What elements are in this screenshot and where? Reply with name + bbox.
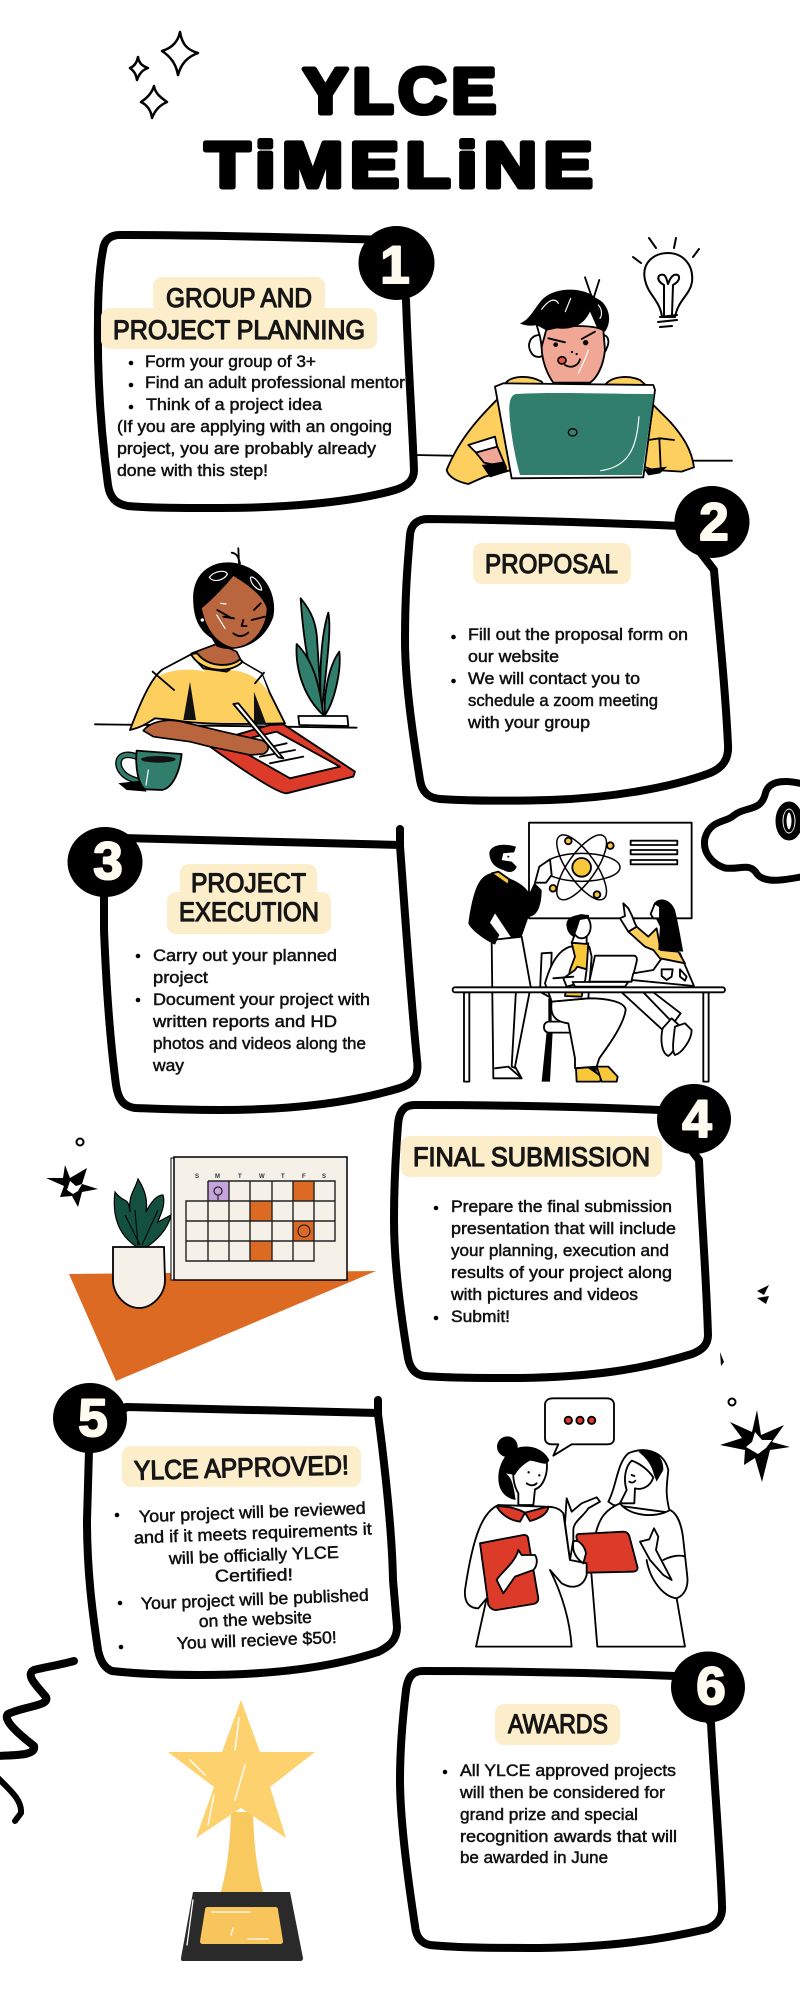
doodles: right small marks [720, 1285, 769, 1366]
number badge 2: 2 [699, 493, 729, 552]
text: step 3 list: Document your project with [153, 990, 370, 1009]
text: step 6 list: grand prize and special [460, 1805, 638, 1824]
calendar: S [322, 1174, 326, 1180]
number badge 5: 5 [78, 1389, 108, 1448]
text: step 4 list [434, 1197, 676, 1326]
number badge 1: 1 [380, 236, 410, 295]
number badge 2 [674, 486, 750, 558]
clipboard [143, 703, 355, 793]
number badge 6: 6 [696, 1657, 726, 1716]
calendar: T [281, 1174, 285, 1180]
text: step 3 list: way [152, 1056, 185, 1075]
calendar: W [259, 1174, 265, 1180]
text: step 2 list: with your group [467, 713, 590, 732]
doodle: star left [46, 1138, 98, 1207]
heading: final submission: FINAL SUBMISSION [413, 1142, 650, 1172]
text: step 5 list: and if it meets requirements it [134, 1519, 372, 1548]
text: step 1 list: (If you are applying with an ongoing [117, 417, 392, 436]
seated woman [620, 899, 694, 1056]
title [205, 55, 593, 201]
text: step 4 list: your planning, execution and [451, 1241, 669, 1260]
calendar [171, 1157, 347, 1280]
panel: step 2 proposal [405, 486, 750, 801]
text: step 6 list [443, 1761, 677, 1867]
panel: step 5 ylce approved [53, 1383, 397, 1675]
right woman [576, 1450, 687, 1647]
text: step 4 list: presentation that will include [451, 1219, 676, 1238]
whiteboard [529, 823, 692, 918]
text: step 2 list: schedule a zoom meeting [468, 691, 658, 710]
heading: group and project planning: GROUP AND [166, 283, 312, 313]
illustration: team at whiteboard [453, 823, 725, 1082]
laptop base [573, 982, 628, 987]
text: step 1 list: project, you are probably already [117, 439, 377, 458]
heading: project execution [167, 864, 331, 934]
number badge 3: 3 [93, 832, 123, 891]
text: step 1 list: done with this step! [117, 461, 268, 480]
text: step 4 list: Prepare the final submission [451, 1197, 672, 1216]
text: step 3 list: written reports and HD [152, 1012, 337, 1031]
heading: final submission [401, 1136, 662, 1177]
speech bubble [545, 1398, 614, 1456]
panel: step 1 group and project planning [98, 226, 434, 508]
doodle: scribble cloud [704, 781, 800, 880]
text: step 3 list: project [153, 968, 208, 987]
panel: step 3 project execution [68, 827, 417, 1110]
text: step 2 list: our website [468, 647, 559, 666]
illustration: two women talking [465, 1398, 687, 1647]
plant [296, 598, 348, 726]
heading: group and project planning: PROJECT PLANNING [113, 315, 365, 345]
number badge 3 [68, 827, 142, 897]
title: YLCE [303, 55, 496, 127]
text: step 6 list: All YLCE approved projects [460, 1761, 676, 1780]
text: step 3 list: Carry out your planned [153, 946, 337, 965]
text: step 6 list: be awarded in June [460, 1848, 608, 1867]
text: step 6 list: will then be considered for [459, 1783, 665, 1802]
heading: project execution: PROJECT [191, 868, 306, 898]
text: step 5 list [115, 1499, 372, 1653]
number badge 4 [657, 1084, 731, 1154]
doodle: left squiggle [0, 1661, 74, 1821]
number badge 4: 4 [682, 1090, 712, 1149]
heading: awards: AWARDS [508, 1709, 608, 1739]
table top [453, 987, 725, 992]
heading: awards [495, 1704, 620, 1745]
coffee cup [118, 751, 182, 792]
text: step 1 list: Find an adult professional mentor [145, 373, 405, 392]
icon: lightbulb [633, 238, 699, 327]
illustration: woman writing [95, 548, 357, 793]
text: step 5 list: Certified! [215, 1565, 293, 1586]
text: step 4 list: Submit! [451, 1307, 510, 1326]
number badge 1 [358, 226, 434, 300]
man head [520, 277, 609, 383]
laptop [495, 383, 655, 478]
icon: sparkles [130, 32, 198, 118]
text: step 5 list: Your project will be reviewed [139, 1499, 366, 1526]
heading: group and project planning [101, 277, 377, 349]
woman [130, 548, 285, 730]
heading: project execution: EXECUTION [179, 897, 319, 927]
text: step 2 list: Fill out the proposal form on [468, 625, 688, 644]
number badge 6 [671, 1652, 745, 1722]
panel: step 4 final submission [394, 1084, 731, 1378]
text: step 3 list [136, 946, 370, 1075]
table [464, 992, 709, 1082]
text: step 5 list: will be officially YLCE [167, 1543, 339, 1568]
heading: ylce approved: YLCE APPROVED! [133, 1450, 349, 1486]
title: TiMELiNE [205, 129, 593, 201]
text: step 5 list: Your project will be published [141, 1586, 369, 1613]
panel: step 6 awards [400, 1652, 745, 1948]
text: step 1 list [117, 352, 405, 480]
calendar: M [215, 1174, 220, 1180]
text: step 5 list: on the website [198, 1608, 312, 1631]
text: step 6 list: recognition awards that will [460, 1827, 677, 1846]
calendar: S [195, 1174, 199, 1180]
number badge 5 [53, 1383, 127, 1453]
text: step 1 list: Think of a project idea [146, 395, 323, 414]
doodle: star right [720, 1398, 790, 1482]
heading: proposal: PROPOSAL [485, 549, 618, 579]
calendar: F [302, 1174, 306, 1180]
illustration: gold trophy [168, 1700, 315, 1961]
text: step 5 list: You will recieve $50! [176, 1628, 337, 1653]
potted plant [113, 1179, 171, 1308]
heading: proposal [473, 543, 631, 584]
seated man [540, 915, 637, 1082]
illustration: calendar on table [69, 1157, 376, 1381]
illustration: man with laptop [415, 277, 732, 484]
text: step 2 list: We will contact you to [468, 669, 640, 688]
text: step 3 list: photos and videos along the [153, 1034, 366, 1053]
left woman [465, 1436, 600, 1647]
text: step 4 list: with pictures and videos [450, 1285, 638, 1304]
text: step 4 list: results of your project along [451, 1263, 672, 1282]
standing man [468, 845, 552, 1078]
calendar: T [238, 1174, 242, 1180]
text: step 1 list: Form your group of 3+ [145, 352, 316, 371]
text: step 2 list [451, 625, 688, 732]
